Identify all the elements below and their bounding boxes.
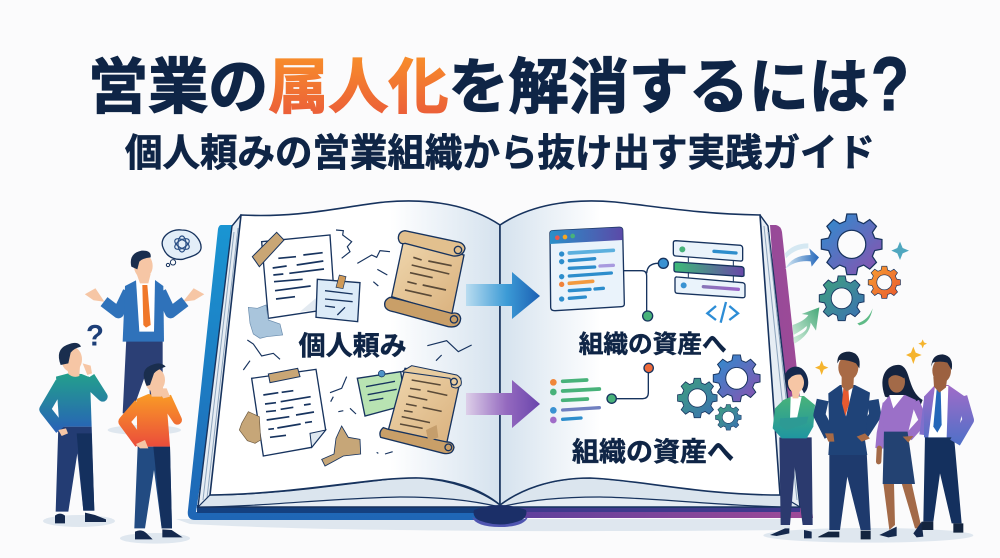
woman in green jacket <box>770 367 815 538</box>
sparkles gold <box>815 339 927 375</box>
people: confident team on the right <box>763 352 973 543</box>
man in navy suit <box>818 352 875 539</box>
people: thinking team on the left <box>43 230 202 544</box>
left page block edge <box>198 215 500 507</box>
checklist <box>550 379 599 423</box>
spine clasp <box>474 505 526 527</box>
crumpled document top <box>252 232 335 318</box>
software window <box>550 227 624 311</box>
thought bubble <box>162 230 201 267</box>
floating gears <box>819 214 900 321</box>
torn fragment tan left <box>239 412 261 443</box>
green swoosh <box>857 308 873 325</box>
title: ? <box>871 42 909 127</box>
left page <box>210 201 500 505</box>
right page illustrations: organised assets <box>550 214 927 467</box>
right cover <box>500 225 813 518</box>
subtitle: 個人頼みの営業組織から抜け出す実践ガイド <box>125 133 875 175</box>
book ground shadow <box>176 519 790 531</box>
arrow: blue transition <box>466 272 540 319</box>
left page illustrations: scattered documents <box>239 230 472 466</box>
parchment scroll bottom <box>380 366 461 454</box>
person in orange sweater <box>120 363 190 544</box>
question mark: ? <box>86 319 104 352</box>
right page stack bottom <box>500 478 800 507</box>
connector with nodes <box>607 363 653 403</box>
document with curled corner <box>252 368 326 456</box>
man in purple jacket <box>922 354 968 533</box>
sticky note top <box>316 275 360 322</box>
left page stack bottom <box>198 478 500 507</box>
left cover <box>188 225 500 520</box>
torn fragment blue <box>248 305 283 338</box>
title: 営業の属人化を解消するには <box>88 54 869 121</box>
right page block edge <box>500 215 800 507</box>
right page <box>500 201 780 505</box>
open book <box>176 201 813 531</box>
torn fragment tan bottom <box>322 426 361 466</box>
curved arrow green <box>793 307 819 344</box>
person in teal sweater <box>43 343 115 527</box>
label: 組織の資産へ 1: 組織の資産へ <box>579 330 727 358</box>
database stack <box>673 241 745 298</box>
label: 個人頼み: 個人頼み <box>299 331 407 361</box>
code icon <box>707 302 738 323</box>
sparkle teal <box>891 242 909 260</box>
presenter in blue suit <box>87 251 202 435</box>
label: 組織の資産へ 2: 組織の資産へ <box>572 437 734 467</box>
woman in purple blouse <box>879 365 923 537</box>
team ground shadow <box>763 528 973 543</box>
parchment scroll top <box>385 231 465 327</box>
connector lines <box>624 258 668 321</box>
curved arrow blue <box>785 243 819 269</box>
cracks <box>243 230 472 454</box>
green sticky note <box>357 370 406 416</box>
arrow: purple transition <box>466 380 540 428</box>
gears on page <box>678 355 760 430</box>
